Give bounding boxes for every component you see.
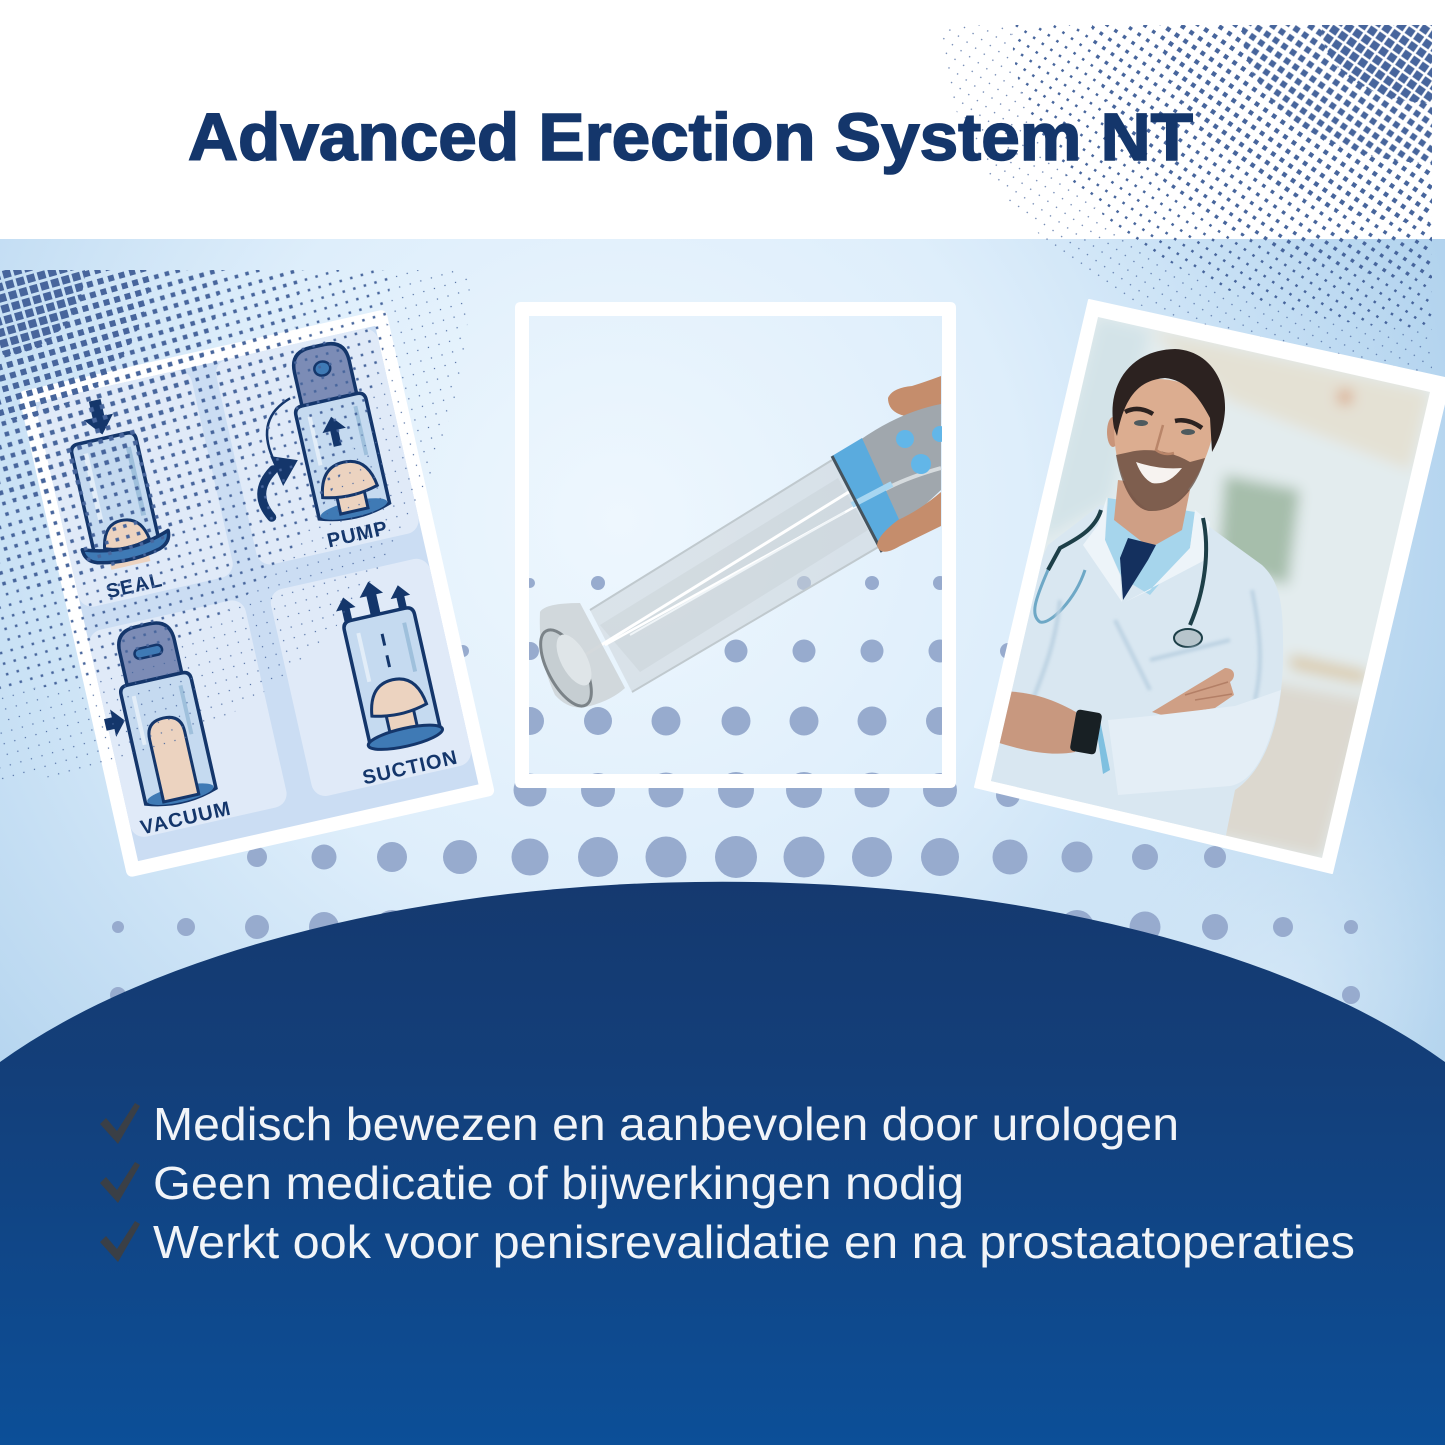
benefit 3: Werkt ook voor penisrevalidatie en na prostaatoperaties [153, 1216, 1355, 1268]
panel: doctor photo card [975, 300, 1445, 873]
step: pump [232, 338, 391, 536]
dark arc panel [0, 882, 1445, 1445]
benefit 1: Medisch bewezen en aanbevolen door urologen [153, 1098, 1179, 1150]
step: suction [331, 573, 444, 755]
icon: handheld vacuum pump [530, 376, 948, 714]
label: vacuum: VACUUM [138, 798, 233, 839]
benefit list [100, 1098, 1355, 1268]
label: suction: SUCTION [361, 747, 460, 789]
panel: pump step diagram card [18, 309, 495, 878]
step: seal [51, 391, 174, 575]
label: seal: SEAL [104, 569, 165, 603]
title: Advanced Erection System NT [188, 100, 1193, 175]
photo: smiling doctor [980, 300, 1440, 870]
step: vacuum [86, 617, 217, 815]
label: pump: PUMP [325, 517, 390, 552]
benefit 2: Geen medicatie of bijwerkingen nodig [153, 1157, 964, 1209]
panel: product photo card [515, 302, 956, 788]
